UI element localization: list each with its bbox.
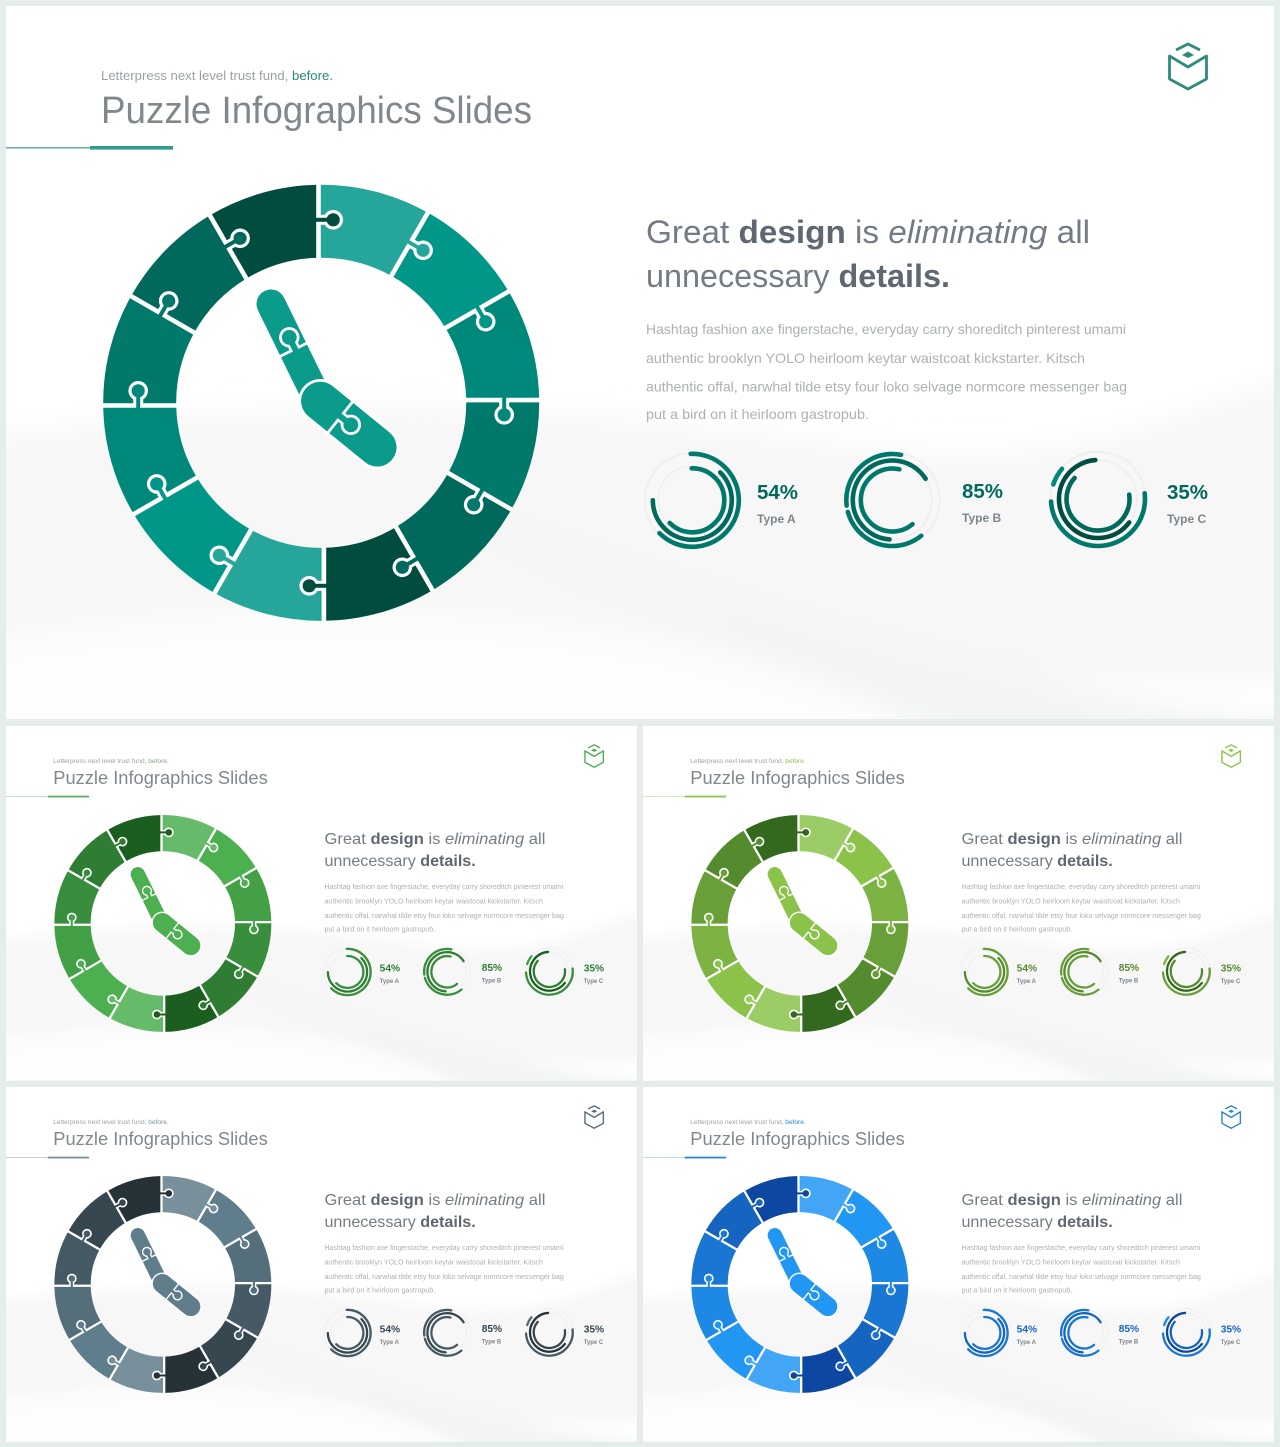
stat C	[1167, 482, 1208, 526]
body text: authentic offal, narwhal tilde etsy four loko selvage normcore messenger bag	[646, 378, 1127, 394]
stat B	[962, 481, 1003, 525]
body text: Hashtag fashion axe fingerstache, everyday carry shoreditch pinterest umami	[324, 884, 564, 891]
clock hands	[137, 1235, 191, 1307]
title underline	[6, 146, 173, 150]
stat C	[1221, 963, 1241, 985]
subtitle: Letterpress next level trust fund, before.	[101, 68, 333, 83]
body text: authentic offal, narwhal tilde etsy four loko selvage normcore messenger bag	[324, 913, 564, 920]
puzzle ring	[79, 161, 563, 645]
stat A	[1017, 963, 1037, 985]
puzzle ring	[679, 1164, 920, 1405]
heading line two: unnecessary details.	[324, 1214, 476, 1231]
title: Puzzle Infographics Slides	[690, 1129, 905, 1150]
stat C: Type C	[1221, 1340, 1241, 1346]
donut chart C	[1157, 1303, 1216, 1362]
icon: cube logo	[1170, 44, 1206, 89]
donut chart B	[415, 1301, 479, 1365]
stat A: 54%	[1017, 963, 1037, 974]
stat C: 35%	[584, 1324, 604, 1335]
stat B: Type B	[482, 1340, 502, 1346]
icon: cube logo	[585, 1106, 603, 1128]
heading line two: unnecessary details.	[961, 1214, 1113, 1231]
stat B	[1119, 1324, 1139, 1346]
stat B: Type B	[962, 511, 1001, 525]
title underline	[643, 1157, 726, 1158]
body text: authentic brooklyn YOLO heirloom keytar waistcoat kickstarter. Kitsch	[324, 1260, 543, 1267]
body text: Hashtag fashion axe fingerstache, everyday carry shoreditch pinterest umami	[961, 1245, 1201, 1252]
title: Puzzle Infographics Slides	[53, 1129, 268, 1150]
stat C	[584, 963, 604, 985]
subtitle: Letterpress next level trust fund, before.	[53, 1119, 169, 1126]
body text: Hashtag fashion axe fingerstache, everyday carry shoreditch pinterest umami	[646, 321, 1126, 337]
donut chart A	[320, 944, 375, 1000]
title: Puzzle Infographics Slides	[101, 90, 532, 132]
stat B	[1119, 963, 1139, 985]
donut chart A	[957, 944, 1012, 1000]
body text: put a bird on it heirloom gastropub.	[646, 406, 869, 422]
stat C: 35%	[584, 963, 604, 974]
body text: authentic brooklyn YOLO heirloom keytar waistcoat kickstarter. Kitsch	[961, 1260, 1180, 1267]
body text	[646, 321, 1127, 422]
stat A: Type A	[1017, 1340, 1037, 1346]
title underline	[6, 1157, 89, 1158]
heading line two: unnecessary details.	[324, 853, 476, 870]
panel: green slide	[0, 726, 660, 1101]
stat C	[584, 1324, 604, 1346]
stat C: 35%	[1221, 1324, 1241, 1335]
title: Puzzle Infographics Slides	[53, 768, 268, 789]
stat B: Type B	[1119, 979, 1139, 985]
body text	[324, 1245, 564, 1295]
body text: put a bird on it heirloom gastropub.	[961, 1288, 1072, 1295]
donut chart C	[520, 942, 579, 1001]
stat B: 85%	[1119, 963, 1139, 974]
panel: large teal slide	[0, 6, 1280, 760]
stat A	[1017, 1324, 1037, 1346]
donut chart B	[415, 940, 479, 1004]
puzzle ring	[42, 803, 283, 1044]
heading: Great design is eliminating all	[324, 1192, 545, 1209]
stat C: 35%	[1167, 482, 1208, 504]
panel: lime slide	[625, 726, 1280, 1101]
stat B: 85%	[962, 481, 1003, 503]
body text: put a bird on it heirloom gastropub.	[324, 927, 435, 934]
body text: authentic brooklyn YOLO heirloom keytar waistcoat kickstarter. Kitsch	[324, 899, 543, 906]
body text: Hashtag fashion axe fingerstache, everyday carry shoreditch pinterest umami	[324, 1245, 564, 1252]
panel: blue slide	[625, 1087, 1280, 1447]
donut chart A	[636, 444, 748, 556]
body text: authentic offal, narwhal tilde etsy four loko selvage normcore messenger bag	[961, 913, 1201, 920]
stat A	[380, 1324, 400, 1346]
heading line two: unnecessary details.	[646, 258, 950, 294]
heading: Great design is eliminating all	[646, 214, 1090, 250]
donut chart C	[1157, 942, 1216, 1001]
title underline	[643, 796, 726, 797]
clock hands	[774, 874, 828, 946]
stat B	[482, 963, 502, 985]
clock hands	[774, 1235, 828, 1307]
stat A	[757, 482, 798, 526]
stat B	[482, 1324, 502, 1346]
body text: Hashtag fashion axe fingerstache, everyday carry shoreditch pinterest umami	[961, 884, 1201, 891]
stat A: Type A	[1017, 979, 1037, 985]
donut chart B	[1052, 940, 1116, 1004]
stat C: Type C	[584, 1340, 604, 1346]
stat A: Type A	[380, 979, 400, 985]
stat C: Type C	[584, 979, 604, 985]
heading: Great design is eliminating all	[961, 831, 1182, 848]
donut chart B	[828, 435, 957, 565]
stat A: 54%	[380, 963, 400, 974]
body text: authentic brooklyn YOLO heirloom keytar waistcoat kickstarter. Kitsch	[961, 899, 1180, 906]
icon: cube logo	[1222, 1106, 1240, 1128]
stat A	[380, 963, 400, 985]
donut chart A	[320, 1305, 375, 1361]
body text: authentic brooklyn YOLO heirloom keytar waistcoat kickstarter. Kitsch	[646, 350, 1085, 366]
body text: put a bird on it heirloom gastropub.	[324, 1288, 435, 1295]
clock hands	[137, 874, 191, 946]
stat A: 54%	[380, 1324, 400, 1335]
panel: blue-grey slide	[0, 1087, 660, 1447]
stat B: Type B	[482, 979, 502, 985]
icon: cube logo	[585, 745, 603, 767]
stat C: Type C	[1167, 512, 1206, 526]
puzzle ring	[679, 803, 920, 1044]
heading: Great design is eliminating all	[961, 1192, 1182, 1209]
heading: Great design is eliminating all	[324, 831, 545, 848]
subtitle: Letterpress next level trust fund, before.	[690, 758, 806, 765]
body text	[324, 884, 564, 934]
stat C	[1221, 1324, 1241, 1346]
donut chart A	[957, 1305, 1012, 1361]
stat C: Type C	[1221, 979, 1241, 985]
stat A: Type A	[757, 512, 796, 526]
stat B: 85%	[1119, 1324, 1139, 1335]
heading line two: unnecessary details.	[961, 853, 1113, 870]
subtitle: Letterpress next level trust fund, before.	[690, 1119, 806, 1126]
puzzle ring	[42, 1164, 283, 1405]
body text: authentic offal, narwhal tilde etsy four loko selvage normcore messenger bag	[961, 1274, 1201, 1281]
stat B: 85%	[482, 963, 502, 974]
body text: authentic offal, narwhal tilde etsy four loko selvage normcore messenger bag	[324, 1274, 564, 1281]
stat B: Type B	[1119, 1340, 1139, 1346]
donut chart B	[1052, 1301, 1116, 1365]
clock hands	[270, 304, 377, 448]
body text	[961, 884, 1201, 934]
stat A: Type A	[380, 1340, 400, 1346]
donut chart C	[1039, 440, 1157, 558]
subtitle: Letterpress next level trust fund, before.	[53, 758, 169, 765]
stat B: 85%	[482, 1324, 502, 1335]
donut chart C	[520, 1303, 579, 1362]
title: Puzzle Infographics Slides	[690, 768, 905, 789]
stat C: 35%	[1221, 963, 1241, 974]
stat A: 54%	[1017, 1324, 1037, 1335]
icon: cube logo	[1222, 745, 1240, 767]
body text: put a bird on it heirloom gastropub.	[961, 927, 1072, 934]
stat A: 54%	[757, 482, 798, 504]
title underline	[6, 796, 89, 797]
body text	[961, 1245, 1201, 1295]
